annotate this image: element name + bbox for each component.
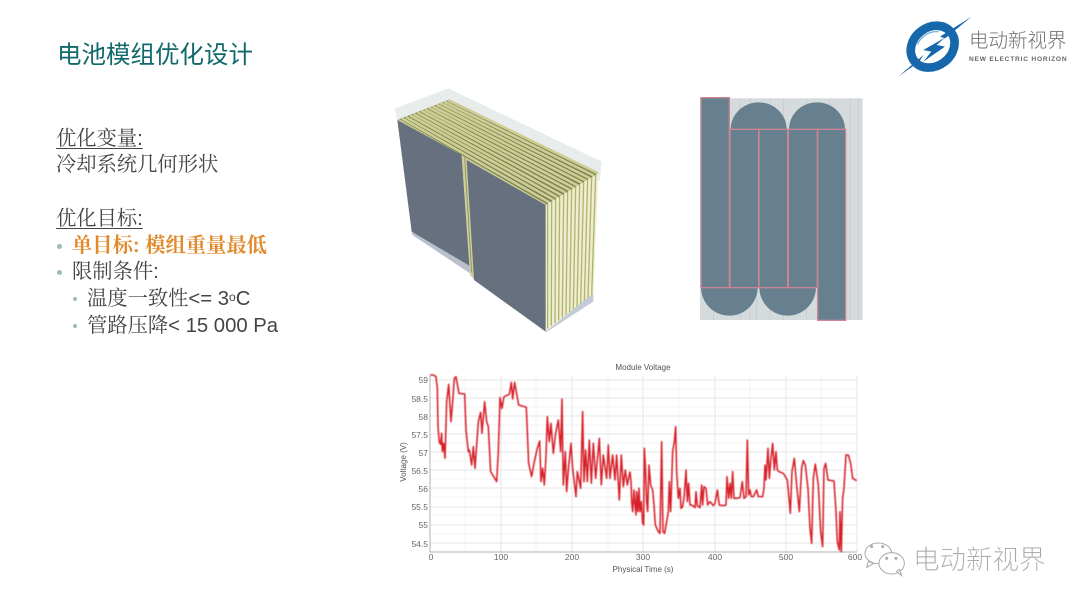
line chart: module voltage: 54.5 [411,539,428,549]
line chart: module voltage: 57.5 [411,430,428,440]
logo name: 电动新视界 [969,30,1067,52]
line chart: module voltage: 56 [419,484,428,494]
text block: optimisation goals [56,208,278,337]
line chart: module voltage: 500 [779,552,793,562]
icon: brand logo mark [898,17,972,77]
title: 电池模组优化设计 [57,42,253,69]
icon: wechat watermark [865,543,904,576]
line chart: module voltage: Physical Time (s) [613,565,674,574]
line chart: module voltage: 58.5 [411,394,428,404]
logo tagline: NEW ELECTRIC HORIZON [969,56,1067,63]
line chart: module voltage: Voltage (V) [399,442,408,482]
line chart: module voltage: Module Voltage [615,363,671,372]
line chart: module voltage: 200 [565,552,579,562]
line chart: module voltage [399,363,862,574]
text block: optimisation goals: 温度一致性<= 3oC [87,288,250,310]
line chart: module voltage: 58 [419,412,428,422]
text block: optimisation goals: 单目标: 模组重量最低 [72,235,267,257]
text block: optimisation goals: 优化目标: [56,208,143,230]
line chart: module voltage: 57 [419,448,428,458]
text block: optimisation variable: 冷却系统几何形状 [56,154,218,176]
cooling channel serpentine diagram [700,98,863,320]
text block: optimisation goals: 管路压降< 15 000 Pa [87,315,278,337]
battery module 3D model [395,88,602,333]
line chart: module voltage: 55.5 [411,502,428,512]
line chart: module voltage: 55 [419,520,428,530]
line chart: module voltage: 59 [419,375,428,385]
text block: optimisation goals: 限制条件: [72,261,159,283]
line chart: module voltage: 600 [848,552,862,562]
watermark text: 电动新视界 [913,545,1046,575]
line chart: module voltage: 56.5 [411,466,428,476]
line chart: module voltage: 100 [494,552,508,562]
text block: optimisation variable: 优化变量: [56,128,143,150]
line chart: module voltage: 400 [708,552,722,562]
line chart: module voltage: 300 [636,552,650,562]
line chart: module voltage: 0 [429,552,434,562]
text block: optimisation variable [56,128,218,176]
